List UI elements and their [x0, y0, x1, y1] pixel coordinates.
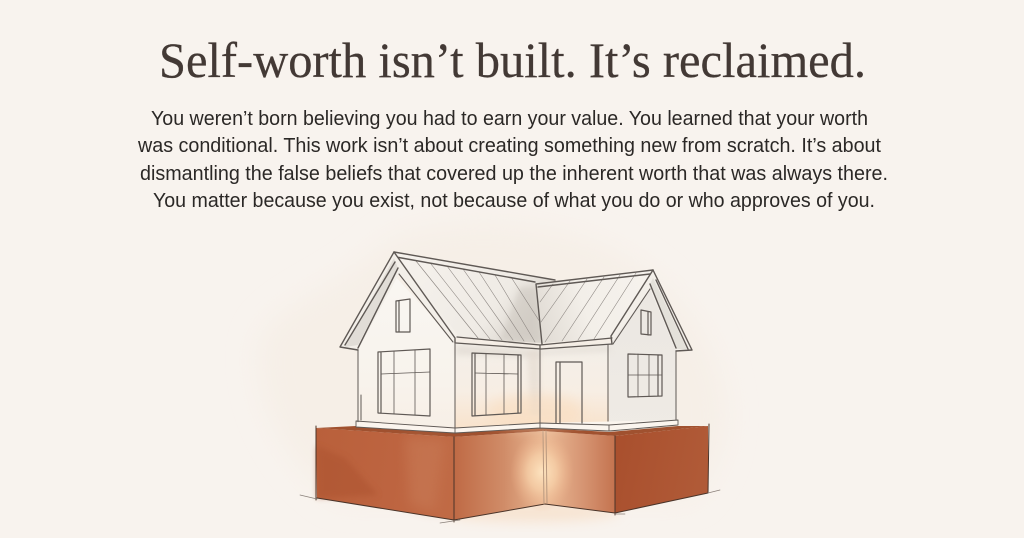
middle window: [472, 353, 521, 416]
intro paragraph: You matter because you exist, not because of what you do or who approves of you.: [153, 190, 875, 212]
door: [556, 362, 582, 423]
right roof: [536, 270, 653, 344]
right window: [628, 354, 662, 397]
intro paragraph: dismantling the false beliefs that covered up the inherent worth that was always there.: [140, 163, 888, 185]
foundation block: [300, 424, 720, 523]
illustration: house on foundation: [300, 252, 720, 523]
left roof: [394, 252, 555, 343]
left attic window: [396, 299, 410, 332]
eave lines: [456, 337, 612, 349]
base trim: [356, 420, 678, 433]
right attic window: [641, 310, 651, 335]
left gable trim: [340, 252, 457, 350]
intro paragraph: was conditional. This work isn’t about creating something new from scratch. It’s about: [137, 135, 881, 157]
left window: [378, 349, 430, 416]
title: Self-worth isn’t built. It’s reclaimed.: [159, 33, 866, 88]
house walls: [358, 275, 676, 431]
intro paragraph: [137, 108, 888, 212]
right gable trim: [610, 270, 692, 351]
intro paragraph: You weren’t born believing you had to earn your value. You learned that your worth: [151, 108, 868, 130]
